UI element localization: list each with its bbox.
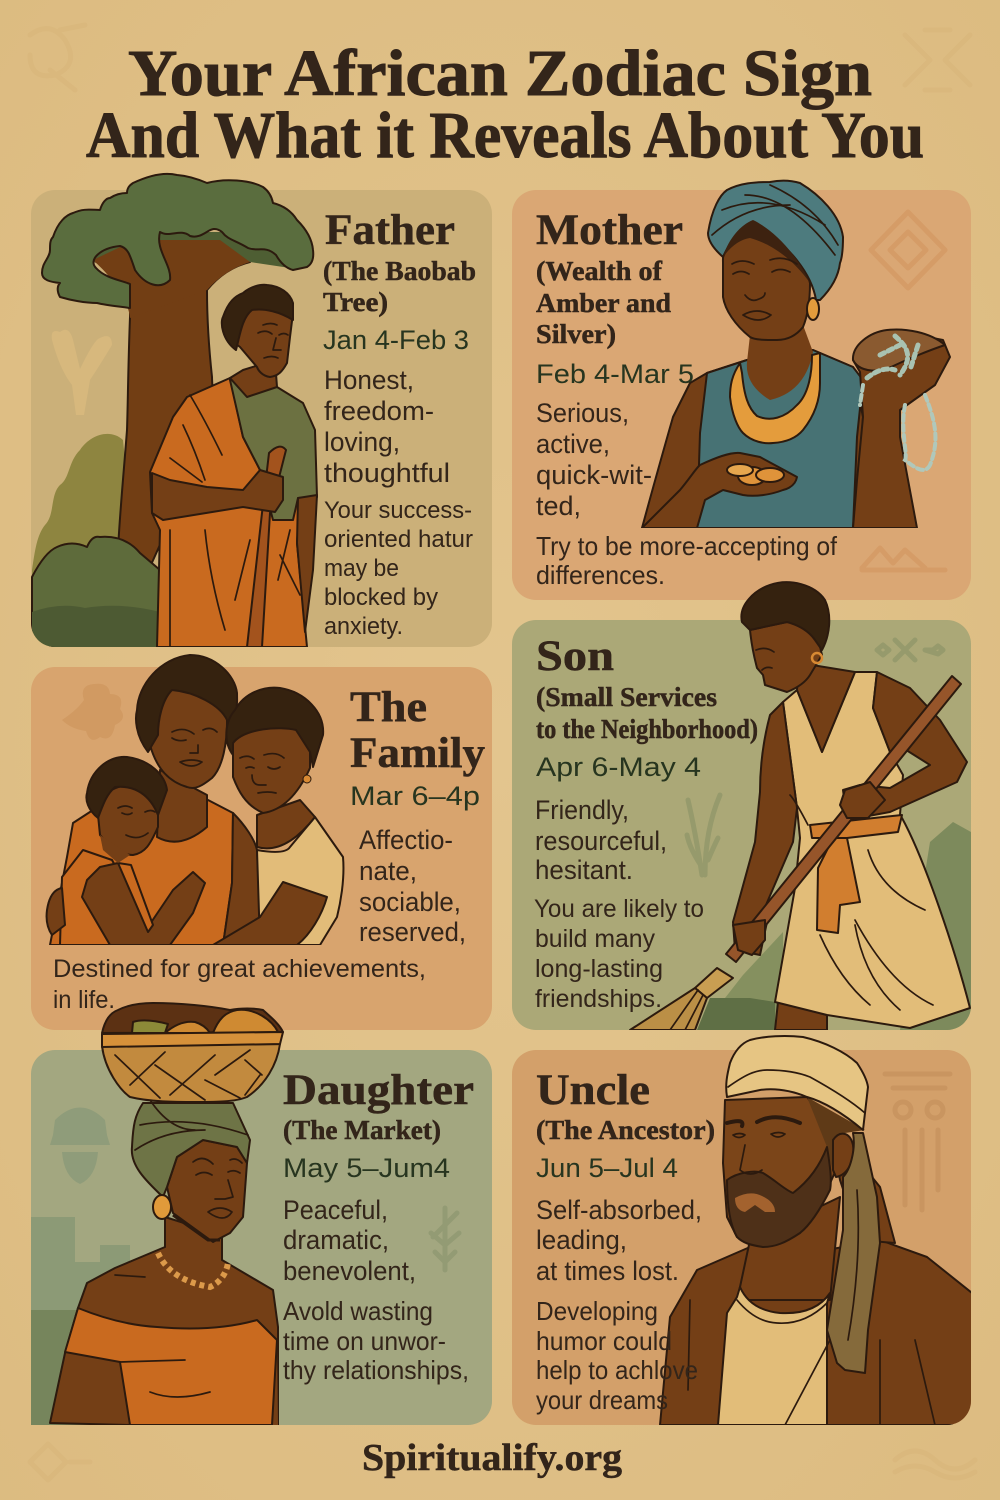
text: Mother traits: quick-wit- <box>536 460 652 490</box>
text: Family advice <box>53 955 426 1014</box>
text: Daughter advice <box>283 1296 469 1385</box>
text: Uncle traits: Self-absorbed, <box>536 1195 702 1225</box>
text: Family traits: sociable, <box>359 887 461 917</box>
decorative motif <box>62 684 123 740</box>
text: Mother advice: Try to be more-accepting of <box>536 531 838 561</box>
text: Family traits: nate, <box>359 856 417 886</box>
title: And What it Reveals About You <box>86 99 924 172</box>
text: Father subtitle <box>323 256 476 317</box>
panel: Uncle <box>512 1036 972 1425</box>
footer: website: Spiritualify.org <box>362 1437 622 1479</box>
text: Uncle advice: Developing <box>536 1296 658 1326</box>
panel: Father <box>31 174 492 647</box>
text: Son advice <box>534 895 704 1013</box>
text: Mother traits: active, <box>536 429 610 459</box>
text: Uncle traits: at times lost. <box>536 1256 679 1286</box>
text: Family advice: in life. <box>53 986 115 1014</box>
text: Son advice: long-lasting <box>535 955 663 983</box>
heading: The Family <box>350 684 486 777</box>
text: Daughter advice: Avold wasting <box>283 1296 433 1326</box>
text: Son traits: resourceful, <box>535 826 667 856</box>
text: Father advice <box>324 497 473 640</box>
text: Family traits <box>359 825 466 947</box>
illustration: woman with basket <box>50 1003 283 1425</box>
text: Son advice: friendships. <box>535 985 662 1013</box>
text: Uncle advice: your dreams <box>536 1385 668 1415</box>
decorative motifs <box>31 1108 459 1425</box>
text: Father advice: anxiety. <box>324 613 403 640</box>
text: Father subtitle: (The Baobab <box>323 256 476 286</box>
text: Daughter traits: benevolent, <box>283 1256 416 1286</box>
text: Daughter traits: dramatic, <box>283 1225 389 1255</box>
title <box>86 37 924 172</box>
text: Uncle traits: leading, <box>536 1225 627 1255</box>
text: Mother dates: Feb 4-Mar 5 <box>536 359 694 389</box>
text: Mother subtitle: Silver) <box>536 319 616 349</box>
text: Family advice: Destined for great achievements, <box>53 955 426 983</box>
text: Father advice: may be <box>324 555 399 582</box>
decorative motifs <box>862 212 945 570</box>
text: Daughter advice: thy relationships, <box>283 1355 469 1385</box>
illustration: bearded man <box>660 1036 972 1425</box>
text: Father traits: freedom- <box>324 396 434 426</box>
text: Father dates: Jan 4-Feb 3 <box>323 325 469 355</box>
text: Family traits: reserved, <box>359 917 466 947</box>
decorative motif <box>885 1074 950 1210</box>
text: Son subtitle: to the Neighborhood) <box>536 714 758 744</box>
text: Son subtitle: (Small Services <box>536 682 717 712</box>
illustration: family embrace <box>47 655 343 945</box>
text: Son traits: Friendly, <box>535 795 629 825</box>
text: Son dates: Apr 6-May 4 <box>536 752 701 782</box>
text: Mother subtitle: Amber and <box>536 288 671 318</box>
text: Uncle advice <box>536 1296 698 1415</box>
text: Mother subtitle <box>536 256 671 349</box>
text: Uncle advice: help to achlove <box>536 1355 698 1385</box>
text: Father advice: Your success- <box>324 497 472 524</box>
illustration: figure sweeping <box>630 582 971 1030</box>
illustration: baobab tree and man <box>32 174 317 647</box>
text: Father traits: thoughtful <box>324 458 450 488</box>
heading: The Family: Family <box>350 730 486 777</box>
panel: The Family <box>31 655 492 1030</box>
text: Son advice: build many <box>535 925 655 953</box>
panel: Daughter <box>31 1003 492 1425</box>
text: Mother traits: ted, <box>536 491 581 521</box>
text: Father advice: oriented hatur <box>324 526 473 553</box>
text: Daughter traits: Peaceful, <box>283 1195 388 1225</box>
text: Son subtitle <box>536 682 758 744</box>
illustration: woman with turban and jewels <box>642 181 950 528</box>
heading: Mother: Mother <box>536 207 683 254</box>
text: Family dates: Mar 6–4p <box>350 781 480 811</box>
text: Mother traits <box>536 398 652 521</box>
text: Father subtitle: Tree) <box>323 287 388 317</box>
text: Uncle traits <box>536 1195 702 1286</box>
text: Mother advice: differences. <box>536 560 665 590</box>
text: Daughter subtitle: (The Market) <box>283 1115 441 1145</box>
text: Father advice: blocked by <box>324 584 438 611</box>
panel: Mother <box>512 181 971 600</box>
text: Mother subtitle: (Wealth of <box>536 256 663 286</box>
text: Father traits <box>324 365 450 488</box>
text: Uncle subtitle: (The Ancestor) <box>536 1115 715 1145</box>
title: Your African Zodiac Sign <box>128 37 872 110</box>
text: Daughter dates: May 5–Jum4 <box>283 1153 450 1183</box>
text: Son traits: hesitant. <box>535 855 633 885</box>
text: Uncle advice: humor could <box>536 1326 672 1356</box>
text: Mother advice <box>536 531 838 590</box>
text: Family traits: Affectio- <box>359 825 453 855</box>
heading: Son: Son <box>536 633 614 680</box>
heading: The Family: The <box>350 684 427 731</box>
text: Father traits: Honest, <box>324 365 414 395</box>
text: Daughter traits <box>283 1195 416 1286</box>
text: Son traits <box>535 795 667 885</box>
heading: Father: Father <box>325 207 455 254</box>
panel: Son <box>512 582 971 1030</box>
text: Daughter advice: time on unwor- <box>283 1326 446 1356</box>
heading: Uncle: Uncle <box>536 1067 650 1114</box>
text: Son advice: You are likely to <box>534 895 704 923</box>
text: Mother traits: Serious, <box>536 398 629 428</box>
text: Father traits: loving, <box>324 427 400 457</box>
heading: Daughter: Daughter <box>283 1067 474 1114</box>
text: Uncle dates: Jun 5–Jul 4 <box>536 1153 678 1183</box>
decorative motifs <box>687 640 943 875</box>
